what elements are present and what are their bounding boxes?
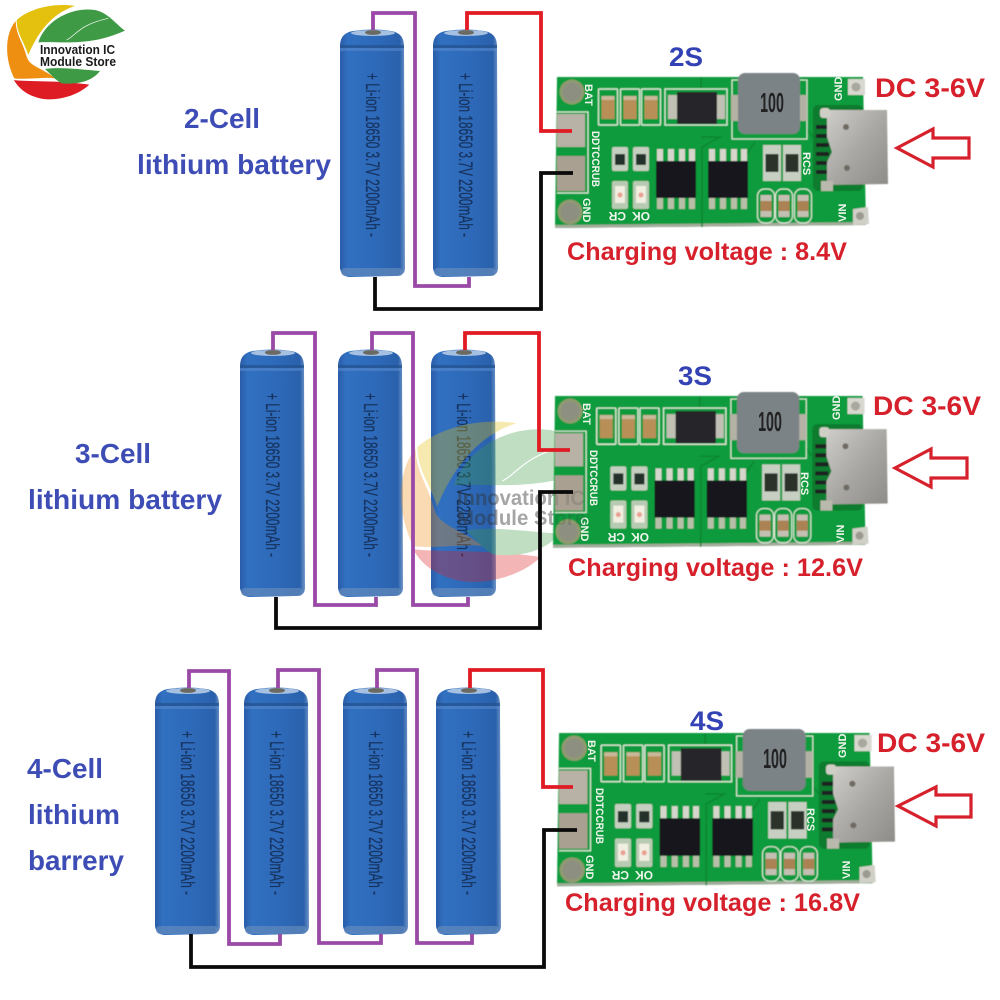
watermark text over the 3S board edge: [457, 487, 586, 530]
watermark logo: Module Store: [457, 507, 586, 530]
battery 1: [155, 688, 220, 935]
arrow: 2S input: [897, 129, 969, 167]
battery 1: [340, 30, 405, 277]
input voltage: 2S: DC 3-6V: [875, 73, 985, 103]
module board: 3S: GND: [578, 517, 590, 542]
store logo: [7, 5, 125, 99]
battery 2: [244, 688, 309, 935]
battery 3: [431, 350, 496, 597]
module board: 4S: GND: [837, 734, 849, 758]
module board: 3S: GND: [831, 396, 843, 420]
watermark text over the 3S board edge: Innovation IC: [457, 487, 585, 510]
heading: 4-cell label: barrery: [28, 845, 124, 876]
heading: 4-cell label: [27, 753, 124, 876]
battery 2: + Li-ion 18650 3.7V 2200mAh -: [454, 73, 475, 237]
charging voltage: 2S: Charging voltage : 8.4V: [567, 238, 847, 266]
wiring: 3S: [273, 333, 573, 628]
battery 2: + Li-ion 18650 3.7V 2200mAh -: [359, 393, 380, 557]
battery 2: [338, 350, 403, 597]
arrow: 3S input: [895, 449, 967, 487]
heading: 2-cell label: lithium battery: [137, 149, 331, 180]
module board: 3S: CR: [607, 530, 625, 544]
module board: 4S: OK: [635, 868, 653, 882]
series label: 2S: 2S: [669, 42, 703, 72]
module board: 2S: DDTCCRUB: [589, 131, 601, 187]
module board: 4S: VIN: [841, 861, 853, 879]
charging voltage: 4S: Charging voltage : 16.8V: [565, 889, 860, 917]
charging voltage: 3S: Charging voltage : 12.6V: [568, 554, 863, 582]
module board: 2S: [555, 73, 888, 228]
heading: 4-cell label: 4-Cell: [27, 753, 103, 784]
module board: 3S: DDTCCRUB: [587, 450, 599, 506]
module board: 4S: DDTCCRUB: [593, 788, 605, 844]
module board: 2S: BAT: [582, 84, 594, 106]
battery pack: 4 cells: [155, 688, 501, 935]
battery 3: + Li-ion 18650 3.7V 2200mAh -: [452, 393, 473, 557]
module board: 4S: RCS: [804, 808, 816, 831]
battery 1: [240, 350, 305, 597]
watermark logo: Innovation IC: [457, 487, 585, 510]
input voltage: 3S: DC 3-6V: [873, 391, 981, 421]
battery 4: + Li-ion 18650 3.7V 2200mAh -: [457, 731, 478, 895]
module board: 3S: 100: [758, 406, 782, 437]
battery 3: + Li-ion 18650 3.7V 2200mAh -: [364, 731, 385, 895]
battery pack: 2 cells: [340, 30, 498, 277]
heading: 4-cell label: lithium: [28, 799, 120, 830]
module board: 3S: OK: [631, 530, 649, 544]
module board: 2S: GND: [580, 198, 592, 222]
module board: 4S: BAT: [585, 740, 597, 762]
store logo: Innovation IC: [40, 43, 115, 57]
watermark text over the 3S board edge: Module Store: [457, 507, 586, 530]
series label: 4S: 4S: [690, 706, 724, 736]
series label: 3S: 3S: [678, 361, 712, 391]
module board: 4S: [557, 729, 895, 886]
module board: 2S: OK: [632, 209, 650, 223]
heading: 3-cell label: [28, 438, 222, 515]
store logo: Module Store: [40, 55, 116, 69]
heading: 2-cell label: 2-Cell: [184, 103, 260, 134]
module board: 4S: CR: [611, 868, 629, 882]
module board: 4S: GND: [583, 855, 595, 880]
battery 3: [343, 688, 408, 935]
module board: 3S: BAT: [580, 403, 592, 425]
input voltage: 4S: DC 3-6V: [877, 728, 985, 758]
module board: 2S: RCS: [800, 152, 812, 175]
heading: 3-cell label: lithium battery: [28, 484, 222, 515]
heading: 3-cell label: 3-Cell: [75, 438, 151, 469]
module board: 2S: CR: [608, 209, 626, 223]
battery 1: + Li-ion 18650 3.7V 2200mAh -: [361, 73, 382, 237]
module board: 4S: 100: [763, 743, 787, 774]
watermark logo: [401, 422, 602, 582]
battery 1: + Li-ion 18650 3.7V 2200mAh -: [176, 731, 197, 895]
battery 2: + Li-ion 18650 3.7V 2200mAh -: [265, 731, 286, 895]
heading: 2-cell label: [137, 103, 331, 180]
battery 1: + Li-ion 18650 3.7V 2200mAh -: [261, 393, 282, 557]
module board: 2S: VIN: [837, 204, 849, 222]
battery 2: [433, 30, 498, 277]
module board: 3S: VIN: [835, 525, 847, 543]
wiring: 2S: [373, 13, 573, 309]
module board: 2S: GND: [833, 76, 845, 101]
wiring: 4S: [189, 670, 577, 967]
battery pack: 3 cells: [240, 350, 496, 597]
module board: 3S: RCS: [798, 472, 810, 495]
module board: 3S: [553, 392, 888, 548]
module board: 2S: 100: [760, 87, 784, 118]
arrow: 4S input: [898, 787, 971, 826]
battery 4: [436, 688, 501, 935]
